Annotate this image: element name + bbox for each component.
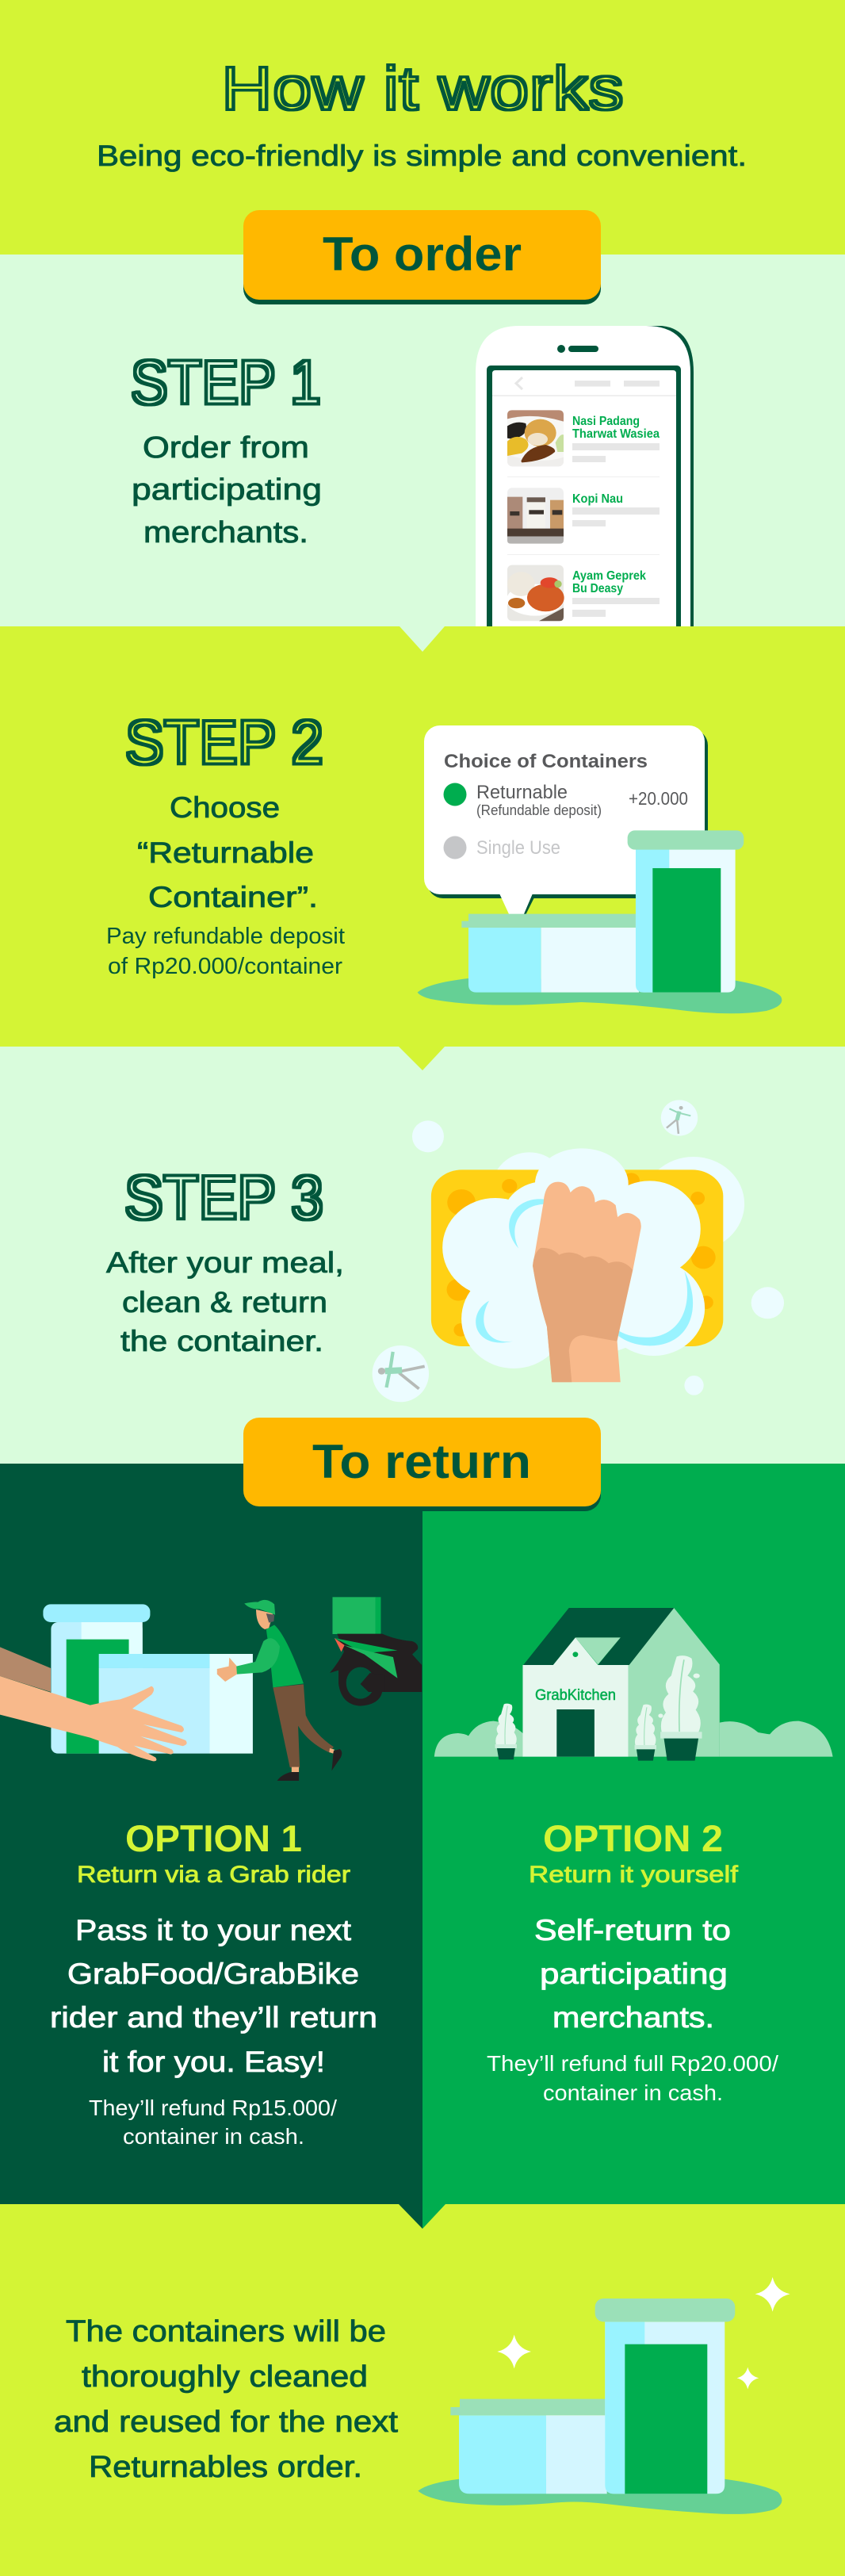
option 2 text: container in cash.: [543, 2080, 723, 2105]
panel: step 2 background: [0, 626, 845, 1047]
step 1 text: participating: [132, 473, 322, 507]
title: How it works: [221, 55, 624, 123]
panel: closing background: [0, 2204, 845, 2576]
option 1 heading: Return via a Grab rider: [77, 1862, 350, 1888]
option 2 text: Self-return to: [534, 1914, 731, 1946]
phone mockup: [476, 326, 694, 635]
restaurant list text: Kopi Nau: [572, 492, 623, 506]
step 2 text: Choose: [170, 791, 280, 824]
step 1 text: [132, 431, 322, 549]
badge: to order: [243, 210, 601, 304]
illustration: grabkitchen house: [434, 1608, 833, 1761]
step 3 text: clean & return: [122, 1286, 327, 1319]
illustration: containers step 2: [418, 830, 782, 1013]
restaurant list text: Ayam Geprek: [572, 569, 646, 583]
option 1 heading: OPTION 1: [125, 1817, 302, 1859]
speech bubble: choice of containers: Returnable: [476, 782, 568, 803]
restaurant list text: Bu Deasy: [572, 582, 623, 595]
box: [99, 1654, 253, 1754]
customer arm: [0, 1647, 187, 1761]
arrow: notch into step 3: [399, 1047, 445, 1070]
restaurant list text: [572, 415, 660, 617]
panel: step 1 background: [0, 255, 845, 626]
option 1 text: container in cash.: [123, 2124, 304, 2149]
illustration: rider taking container: [0, 1597, 422, 1781]
panel: step 3 background: [0, 1047, 845, 1467]
option 1 text: They’ll refund Rp15.000/: [89, 2096, 337, 2120]
option 1 text: Pass it to your next: [75, 1914, 352, 1946]
illustration: clean containers with sparkles: [418, 2277, 790, 2514]
option 2 text: They’ll refund full Rp20.000/: [487, 2051, 778, 2076]
sponge: [431, 1169, 723, 1346]
house: [629, 1608, 720, 1757]
closing text: thoroughly cleaned: [82, 2360, 368, 2394]
closing text: [54, 2315, 398, 2484]
step 2 text: [106, 791, 345, 979]
step 1 text: Order from: [143, 431, 309, 465]
option 1 text: GrabFood/GrabBike: [67, 1958, 359, 1990]
food photo: nasi padang: [507, 410, 564, 466]
step 2 text: Container”.: [148, 881, 318, 913]
house sign: GrabKitchen: [535, 1687, 616, 1704]
scooter: [330, 1597, 422, 1706]
speech bubble: choice of containers: (Refundable deposit): [476, 802, 602, 818]
badge: to order: To order: [323, 228, 522, 281]
option 2 heading: [529, 1817, 739, 1888]
option 1 text: it for you. Easy!: [102, 2046, 325, 2078]
subtitle: Being eco-friendly is simple and convenient.: [97, 140, 747, 172]
step 1 text: merchants.: [143, 516, 308, 549]
panel: option 1 background: [0, 1464, 422, 2204]
closing text: The containers will be: [66, 2315, 386, 2348]
option 2 heading: OPTION 2: [543, 1817, 723, 1859]
step 1 heading: STEP 1: [131, 347, 321, 417]
food photo: ayam geprek: [507, 565, 564, 621]
option 2 heading: Return it yourself: [529, 1862, 739, 1888]
foam highlights: [476, 1199, 693, 1345]
option 2 text: merchants.: [552, 2001, 714, 2034]
arrow: notch from options: [399, 2204, 445, 2229]
tall jar: [43, 1604, 150, 1754]
background foam: [373, 1100, 784, 1402]
option 1 text: rider and they’ll return: [50, 2001, 377, 2034]
option 2 text: [487, 1914, 778, 2105]
step 3 heading: STEP 3: [124, 1162, 323, 1232]
speech bubble: choice of containers: Single Use: [476, 837, 560, 859]
speech bubble: choice of containers: [424, 725, 708, 917]
step 2 heading: STEP 2: [125, 707, 323, 777]
closing text: Returnables order.: [89, 2451, 362, 2484]
step 2 text: “Returnable: [137, 836, 314, 869]
step 2 text: Pay refundable deposit: [106, 924, 345, 949]
plants: [495, 1655, 702, 1761]
hand: [533, 1182, 641, 1382]
floating figures: [378, 1106, 690, 1389]
food photo: kopi nau: [507, 488, 564, 544]
restaurant list text: Tharwat Wasiea: [572, 427, 660, 441]
sparkles: [497, 2277, 790, 2389]
step 3 text: [106, 1246, 344, 1357]
panel: option 2 background: [422, 1464, 845, 2204]
restaurant list text: Nasi Padang: [572, 415, 640, 428]
bushes: [434, 1721, 523, 1757]
speech bubble: choice of containers: Choice of Containers: [444, 751, 648, 772]
illustration: hand washing with sponge: [373, 1100, 784, 1402]
option 2 text: participating: [540, 1958, 728, 1990]
step 2 text: of Rp20.000/container: [108, 954, 342, 979]
badge: to return: [243, 1418, 601, 1511]
step 3 text: After your meal,: [106, 1246, 344, 1279]
closing text: and reused for the next: [54, 2406, 398, 2439]
option 1 heading: [77, 1817, 350, 1888]
rider: [217, 1600, 342, 1781]
foam cloud: [442, 1148, 705, 1368]
speech bubble: choice of containers: +20.000: [629, 788, 688, 809]
badge: to return: To return: [312, 1435, 531, 1488]
panel: header background: [0, 0, 845, 255]
arrow: notch into step 2: [400, 626, 445, 652]
option 1 text: [50, 1914, 377, 2149]
step 3 text: the container.: [120, 1325, 323, 1357]
